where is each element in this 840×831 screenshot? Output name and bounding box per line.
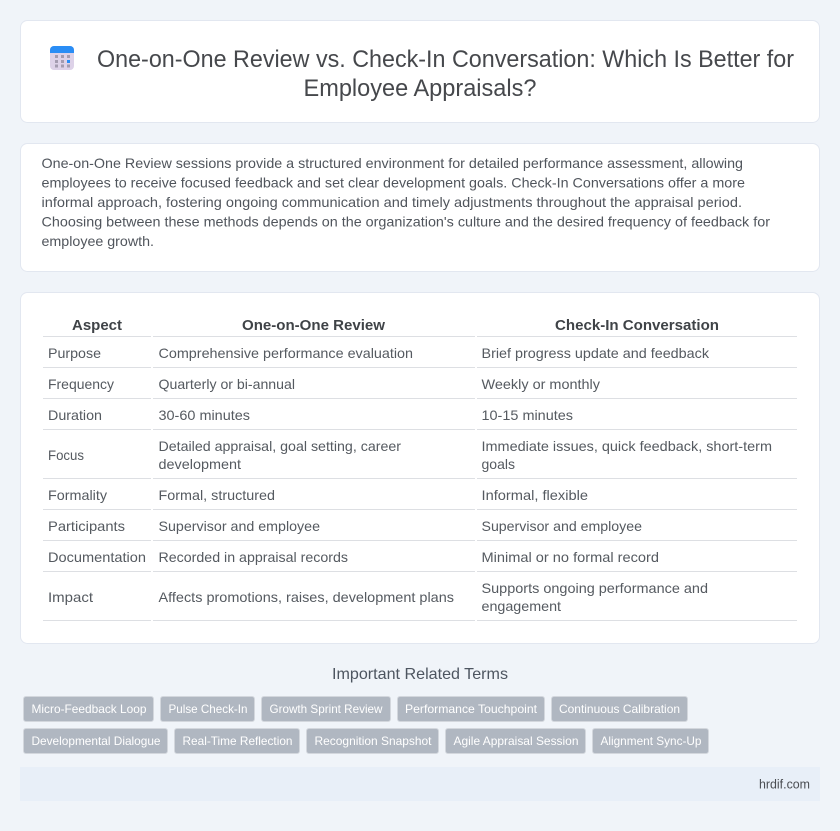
footer xyxy=(20,767,820,801)
tag: pulse check-in xyxy=(160,696,254,722)
related term tags xyxy=(24,696,708,754)
row: frequency xyxy=(48,376,600,392)
tag: performance touchpoint xyxy=(398,696,544,722)
table header: Aspect xyxy=(72,318,122,334)
intro paragraph: informal approach, fostering ongoing communication and timely adjustments throughout the appraisal period. xyxy=(42,194,742,210)
row: frequency: Weekly or monthly xyxy=(482,376,600,392)
row: impact: Supports ongoing performance and xyxy=(482,580,708,596)
footer source: hrdif.com xyxy=(759,776,810,792)
intro paragraph: One-on-One Review sessions provide a structured environment for detailed performance assessment, allowing xyxy=(42,155,743,171)
table rules xyxy=(43,336,797,621)
tag: real-time reflection: Real-Time Reflection xyxy=(182,734,292,748)
related terms heading: Important Related Terms xyxy=(332,666,508,683)
table header: One-on-One Review xyxy=(242,318,386,334)
tag: alignment sync-up xyxy=(592,728,708,754)
row: purpose: Brief progress update and feedback xyxy=(482,345,710,361)
tag: growth sprint review: Growth Sprint Review xyxy=(270,702,383,716)
row: focus: goals xyxy=(482,456,515,472)
intro text panel xyxy=(20,144,820,272)
tag: recognition snapshot: Recognition Snapshot xyxy=(314,734,432,748)
table header xyxy=(72,318,719,334)
title xyxy=(97,46,794,102)
row: participants: Supervisor and employee xyxy=(158,518,320,534)
row: purpose xyxy=(48,345,710,361)
row: duration: 30-60 minutes xyxy=(158,407,250,423)
icon: calendar xyxy=(50,46,74,70)
tag: recognition snapshot xyxy=(306,728,438,754)
row: formality xyxy=(48,487,588,503)
tag: growth sprint review xyxy=(262,696,390,722)
intro paragraph: employees to receive focused feedback and set clear development goals. Check-In Conversations offer a more xyxy=(42,174,745,190)
row: duration: 10-15 minutes xyxy=(482,407,573,423)
row: formality: Informal, flexible xyxy=(482,487,588,503)
tag: pulse check-in: Pulse Check-In xyxy=(168,702,248,716)
tag: continuous calibration: Continuous Calibration xyxy=(559,702,680,716)
tag: micro-feedback loop: Micro-Feedback Loop xyxy=(32,702,147,716)
intro paragraph: employee growth. xyxy=(42,233,154,249)
row: focus: Immediate issues, quick feedback, short-term xyxy=(482,438,772,454)
row: participants xyxy=(48,518,642,534)
row: documentation: Documentation xyxy=(48,549,146,565)
tag: developmental dialogue xyxy=(24,728,168,754)
tag: agile appraisal session: Agile Appraisal Session xyxy=(454,734,578,748)
row: impact xyxy=(48,580,708,614)
intro paragraph: Choosing between these methods depends on the organization's culture and the desired frequency of feedback for xyxy=(42,214,770,230)
row: focus xyxy=(48,438,772,472)
tag: alignment sync-up: Alignment Sync-Up xyxy=(600,734,702,748)
row: formality: Formality xyxy=(48,487,107,503)
row: focus: development xyxy=(158,456,241,472)
tag: performance touchpoint: Performance Touchpoint xyxy=(405,702,538,716)
row: purpose: Purpose xyxy=(48,345,101,361)
row: focus: Detailed appraisal, goal setting, career xyxy=(158,438,401,454)
row: participants: Supervisor and employee xyxy=(482,518,642,534)
row: impact: Impact xyxy=(48,589,93,605)
tag: micro-feedback loop xyxy=(24,696,154,722)
table header: Check-In Conversation xyxy=(555,318,719,334)
row: formality: Formal, structured xyxy=(158,487,275,503)
row: documentation: Minimal or no formal record xyxy=(482,549,659,565)
comparison table panel xyxy=(20,292,820,644)
intro paragraph xyxy=(42,155,770,249)
title: Employee Appraisals? xyxy=(304,75,536,102)
row: frequency: Frequency xyxy=(48,376,114,392)
row: participants: Participants xyxy=(48,518,125,534)
row: documentation: Recorded in appraisal records xyxy=(158,549,348,565)
tag: developmental dialogue: Developmental Dialogue xyxy=(32,734,161,748)
tag: real-time reflection xyxy=(174,728,300,754)
header panel xyxy=(20,20,820,122)
tag: agile appraisal session xyxy=(446,728,586,754)
title: One-on-One Review vs. Check-In Conversation: Which Is Better for xyxy=(97,46,794,73)
row: focus: Focus xyxy=(48,447,84,463)
row: duration xyxy=(48,407,573,423)
tag: continuous calibration xyxy=(552,696,688,722)
row: impact: engagement xyxy=(482,598,561,614)
row: duration: Duration xyxy=(48,407,102,423)
row: documentation xyxy=(48,549,659,565)
row: impact: Affects promotions, raises, development plans xyxy=(158,589,454,605)
row: frequency: Quarterly or bi-annual xyxy=(158,376,295,392)
row: purpose: Comprehensive performance evaluation xyxy=(158,345,413,361)
